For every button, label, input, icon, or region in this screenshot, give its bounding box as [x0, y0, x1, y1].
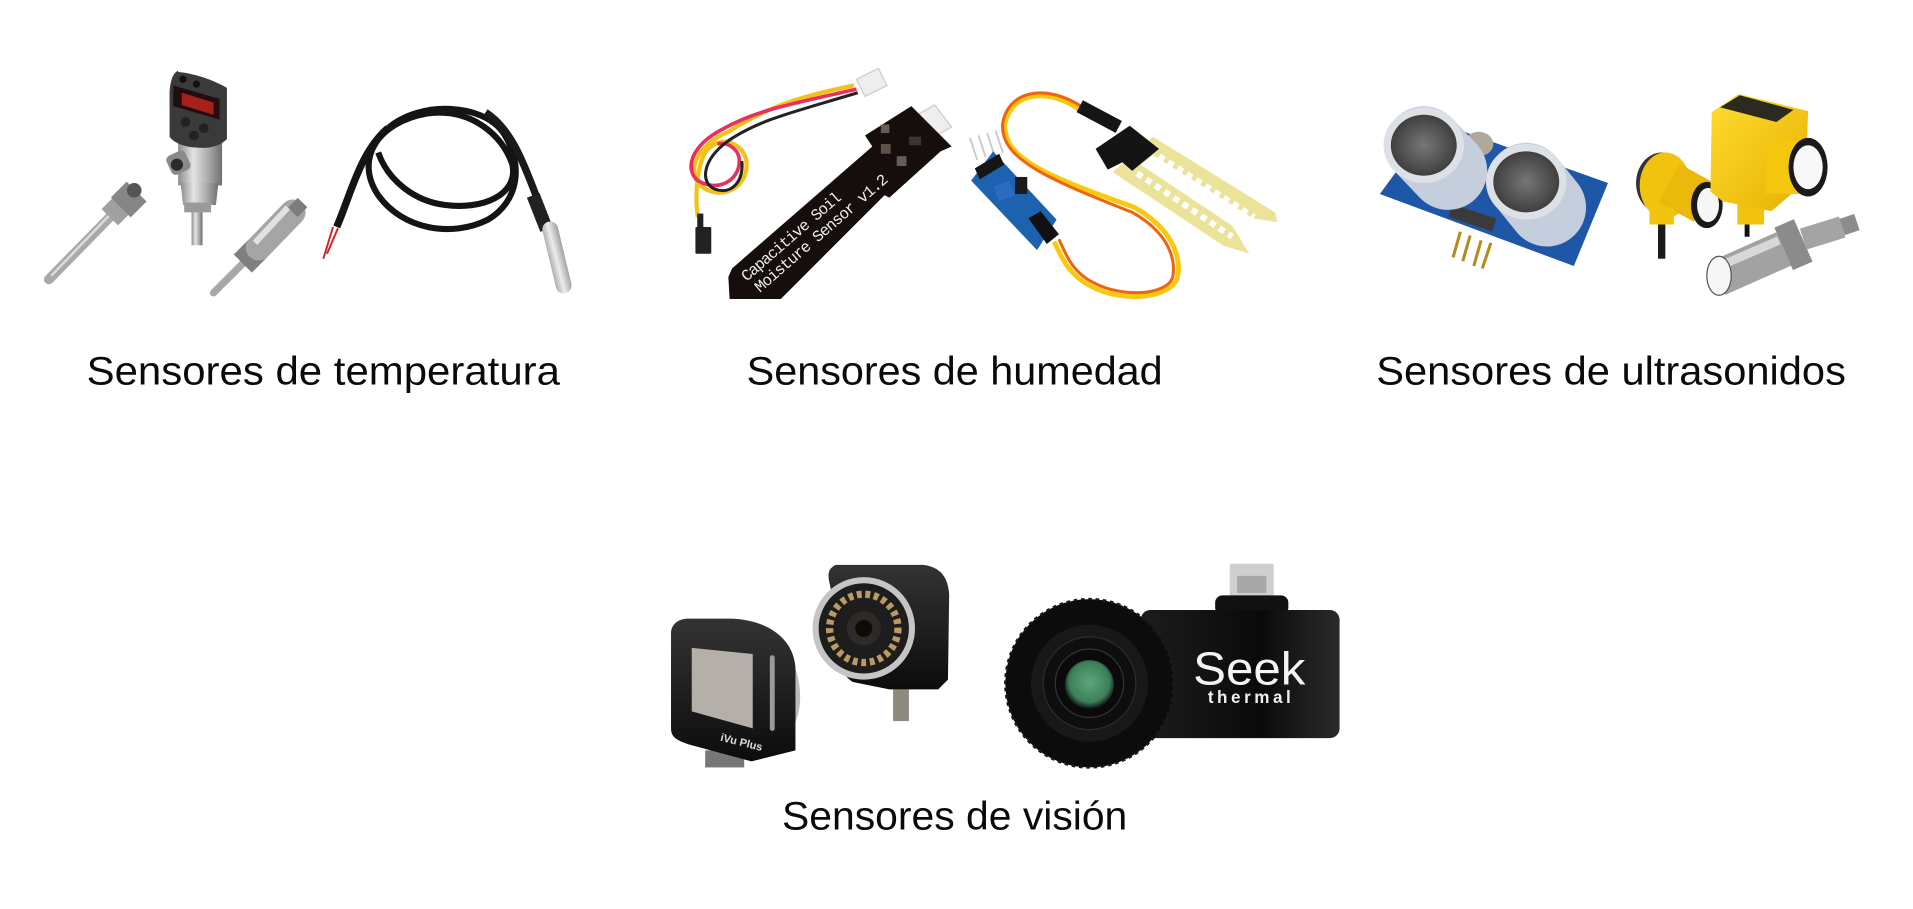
- icon: Seek thermal camera: [1005, 564, 1340, 767]
- thermal logo: thermal: [1208, 688, 1291, 707]
- seek logo: Seek: [1193, 642, 1306, 694]
- camera model text: iVu Plus: [719, 732, 764, 754]
- label: temperatura: Sensores de temperatura: [87, 348, 561, 393]
- board printed text line 1: Capacitive Soil: [738, 189, 846, 286]
- label: humedad: Sensores de humedad: [747, 348, 1163, 393]
- icon: middle probe: [214, 203, 303, 293]
- icon: large yellow box sensor: [1710, 94, 1828, 237]
- icon: ribbon wire with connectors: [691, 85, 858, 228]
- icon: blue comparator module: [970, 131, 1059, 250]
- icon: waterproof cable probe: [323, 109, 564, 286]
- icon: white and black connectors: [695, 68, 952, 254]
- panel: sensores de visión: [671, 564, 1340, 839]
- panel: sensores de temperatura: [49, 71, 564, 393]
- icon: HC-SR04 module: [1380, 107, 1608, 268]
- icon: left threaded probe: [49, 183, 142, 279]
- icon: iVu camera rear: [671, 619, 800, 767]
- icon: iVu camera front: [813, 565, 949, 721]
- icon: small yellow barrel sensor: [1636, 153, 1723, 259]
- label: visión: Sensores de visión: [782, 794, 1127, 839]
- panel: sensores de humedad: [691, 68, 1277, 393]
- icon: orange yellow jumper wire: [1003, 93, 1178, 297]
- panel: sensores de ultrasonidos: [1376, 94, 1857, 393]
- icon: temperature transmitter with display: [165, 71, 227, 245]
- label: ultrasonidos: Sensores de ultrasonidos: [1376, 348, 1846, 393]
- capacitive moisture sensor board: [728, 106, 952, 299]
- icon: metal threaded sensor: [1707, 222, 1857, 295]
- icon: soil probe fork: [1080, 106, 1277, 254]
- board printed text line 2: Moisture Sensor v1.2: [752, 171, 892, 297]
